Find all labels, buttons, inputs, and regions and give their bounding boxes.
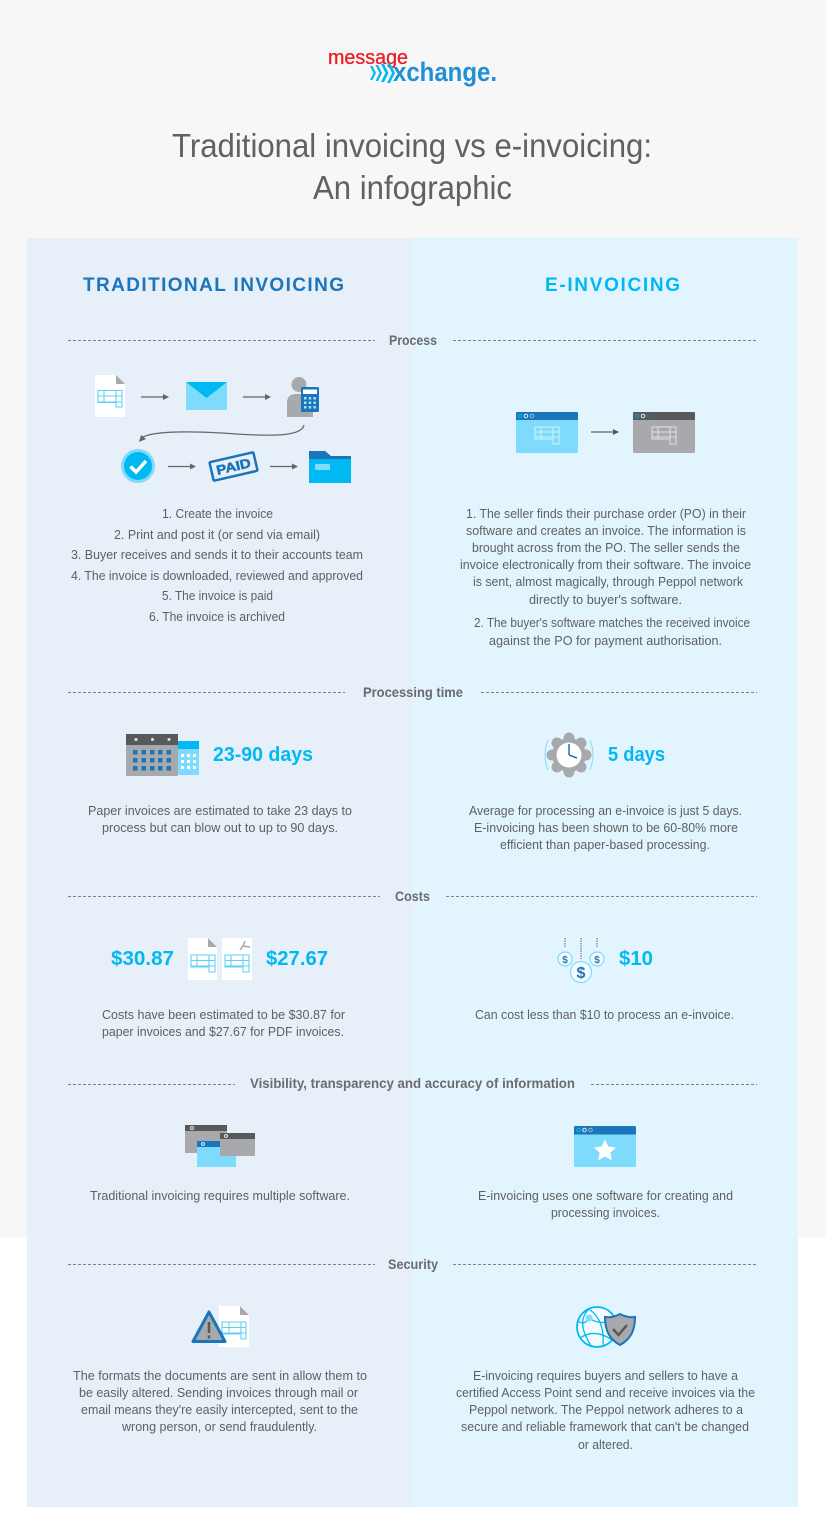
text: e-invoicing processing time: E-invoicing has been shown to be 60-80% more — [474, 820, 738, 835]
process flow: e-invoicing — [516, 412, 695, 453]
stat: $10: $10 — [619, 948, 653, 970]
text: traditional costs: paper invoices and $27.67 for PDF invoices. — [102, 1024, 344, 1039]
text: traditional security: The formats the documents are sent in allow them to — [73, 1368, 367, 1383]
text: traditional process steps: 2. Print and post it (or send via email) — [114, 527, 320, 542]
text: e-invoicing process steps: software and creates an invoice. The information is — [466, 523, 746, 538]
icon: globe and shield — [577, 1307, 635, 1347]
icon: multiple software windows — [185, 1125, 255, 1167]
text: e-invoicing process steps: directly to buyer's software. — [529, 592, 682, 607]
text: e-invoicing security: secure and reliable framework that can't be changed — [461, 1419, 749, 1434]
icon: pdf invoice — [222, 938, 252, 980]
arrow: curved — [139, 425, 304, 442]
text: e-invoicing process steps: against the PO for payment authorisation. — [489, 633, 722, 648]
text: traditional process steps: 1. Create the invoice — [162, 506, 273, 521]
text: traditional security — [73, 1368, 367, 1434]
text: traditional security: email means they're easily intercepted, sent to the — [81, 1402, 358, 1417]
text: e-invoicing process steps — [460, 506, 751, 648]
arrow — [270, 464, 298, 470]
icon: envelope — [186, 382, 227, 410]
panel: e-invoicing background — [412, 238, 798, 1507]
arrow — [243, 394, 271, 400]
text: traditional processing time — [88, 803, 352, 835]
text: e-invoicing process steps: is sent, almost magically, through Peppol network — [473, 574, 743, 589]
arrow — [141, 394, 169, 400]
text: e-invoicing security: Peppol network. The Peppol network adheres to a — [469, 1402, 744, 1417]
icon: single software window with star — [574, 1126, 636, 1167]
text: e-invoicing processing time: Average for processing an e-invoice is just 5 days. — [469, 803, 742, 818]
stat: 5 days: 5 days — [608, 744, 665, 766]
section heading: process: Process — [389, 332, 437, 348]
text: e-invoicing processing time — [469, 803, 742, 852]
text: traditional process steps: 5. The invoice is paid — [162, 588, 273, 603]
logo: xchange. — [393, 57, 497, 87]
stat: $30.87: $30.87 — [111, 948, 174, 970]
icon: falling coins: $ — [577, 965, 586, 982]
stat: $27.67: $27.67 — [266, 948, 328, 970]
icon: approved badge — [121, 449, 155, 483]
icon: folder — [309, 451, 351, 483]
text: e-invoicing process steps: brought across from the PO. The seller sends the — [472, 540, 740, 555]
icon: invoice document — [95, 375, 125, 417]
icon: calendars — [126, 734, 199, 776]
icon: gear clock — [545, 732, 593, 778]
text: e-invoicing process steps: 1. The seller finds their purchase order (PO) in their — [466, 506, 747, 521]
text: e-invoicing process steps: 2. The buyer's software matches the received invoice — [474, 615, 750, 630]
icon: falling coins — [558, 938, 604, 982]
text: traditional process steps — [71, 506, 363, 624]
text: e-invoicing security — [456, 1368, 755, 1452]
text: traditional visibility: Traditional invoicing requires multiple software. — [90, 1188, 350, 1203]
text: e-invoicing process steps: invoice electronically from their software. The invoice — [460, 557, 751, 572]
text: traditional process steps: 4. The invoice is downloaded, reviewed and approved — [71, 568, 363, 583]
logo — [328, 47, 497, 87]
title — [172, 127, 652, 206]
text: e-invoicing processing time: efficient than paper-based processing. — [500, 837, 710, 852]
stat: 23-90 days: 23-90 days — [213, 744, 313, 766]
icon: warning triangle and document — [193, 1306, 249, 1347]
icon: falling coins: $ — [594, 955, 600, 966]
text: traditional costs — [102, 1007, 346, 1039]
text: traditional costs: Costs have been estimated to be $30.87 for — [102, 1007, 346, 1022]
icon: falling coins: $ — [562, 955, 568, 966]
section heading: costs: Costs — [395, 888, 430, 904]
section heading: visibility: Visibility, transparency and accuracy of information — [250, 1075, 575, 1091]
icon: buyer software window — [633, 412, 695, 453]
icon: seller software window — [516, 412, 578, 453]
heading: traditional invoicing: TRADITIONAL INVOICING — [83, 275, 344, 296]
text: traditional processing time: process but can blow out to up to 90 days. — [102, 820, 338, 835]
text: e-invoicing visibility: processing invoices. — [551, 1205, 660, 1220]
text: traditional security: wrong person, or send fraudulently. — [121, 1419, 317, 1434]
panel: traditional invoicing background — [27, 238, 412, 1507]
section heading: processing time: Processing time — [363, 684, 463, 700]
title: An infographic — [313, 169, 512, 206]
icon: paper invoice — [188, 938, 217, 980]
text: e-invoicing costs: Can cost less than $10 to process an e-invoice. — [475, 1007, 734, 1022]
arrow — [168, 464, 196, 470]
title: Traditional invoicing vs e-invoicing: — [172, 127, 652, 164]
text: traditional process steps: 3. Buyer receives and sends it to their accounts team — [71, 547, 363, 562]
icon: paid stamp: PAID — [215, 455, 252, 478]
icon: accountant with calculator — [287, 377, 319, 417]
icon: paid stamp — [209, 452, 258, 481]
text: traditional processing time: Paper invoices are estimated to take 23 days to — [88, 803, 352, 818]
text: e-invoicing visibility: E-invoicing uses one software for creating and — [478, 1188, 733, 1203]
text: e-invoicing visibility — [478, 1188, 733, 1220]
arrow — [591, 429, 619, 435]
logo: message — [328, 47, 408, 69]
text: e-invoicing security: E-invoicing requires buyers and sellers to have a — [473, 1368, 739, 1383]
text: traditional process steps: 6. The invoice is archived — [149, 609, 285, 624]
process flow: traditional — [95, 375, 351, 483]
text: traditional security: be easily altered. Sending invoices through mail or — [79, 1385, 359, 1400]
text: e-invoicing security: or altered. — [578, 1437, 633, 1452]
text: e-invoicing security: certified Access Point send and receive invoices via the — [456, 1385, 755, 1400]
heading: e-invoicing: E-INVOICING — [545, 275, 680, 296]
section heading: security: Security — [388, 1256, 438, 1272]
